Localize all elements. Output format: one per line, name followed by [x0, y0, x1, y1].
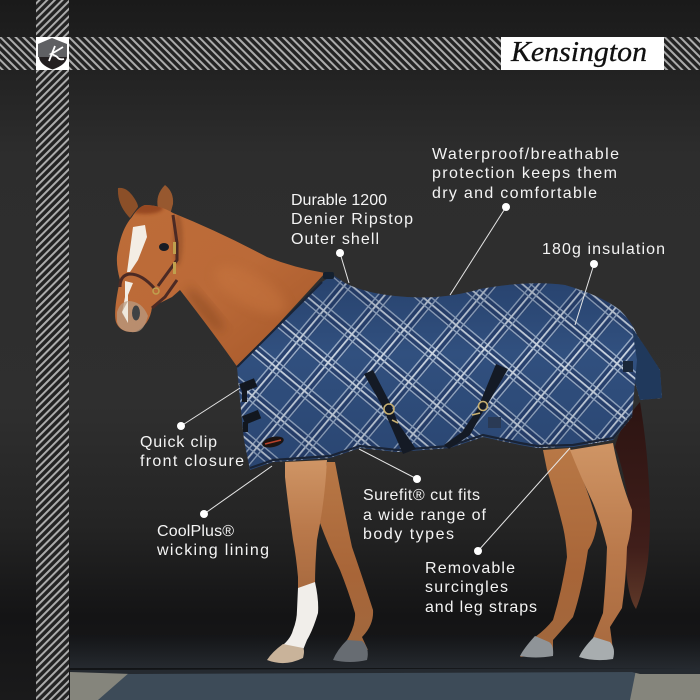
striped vertical band	[36, 0, 69, 700]
callout: wicking lining: CoolPlus®	[157, 523, 234, 540]
left ear	[118, 188, 138, 218]
icon: K shield logo	[36, 37, 69, 70]
far hind leg	[520, 448, 597, 657]
callout: waterproof/breathable: Waterproof/breathable	[432, 146, 619, 163]
callout: outer shell: Durable 1200	[291, 192, 387, 209]
callout: wicking lining	[156, 466, 272, 559]
callout: outer shell: Outer shell	[291, 231, 379, 248]
callout: front closure	[140, 388, 244, 470]
callout: wicking lining: wicking lining	[156, 542, 269, 559]
callout: surcingles	[425, 448, 570, 616]
muzzle	[117, 301, 148, 332]
nostril	[132, 306, 140, 320]
leather halter	[120, 215, 177, 308]
callout: surefit cut: body types	[363, 526, 454, 543]
callout: front closure: Quick clip	[140, 434, 217, 451]
callout: outer shell	[291, 192, 413, 283]
callout: front closure: front closure	[140, 453, 244, 470]
callout: surefit cut: Surefit® cut fits	[363, 487, 480, 504]
callout: surcingles: and leg straps	[425, 599, 537, 616]
callout: insulation: 180g insulation	[542, 241, 665, 258]
callout: waterproof/breathable: protection keeps them	[432, 165, 617, 182]
far front leg	[320, 462, 373, 650]
hooves on hind legs	[520, 636, 614, 660]
near front leg with white sock	[267, 460, 327, 663]
floor and ground	[70, 635, 700, 700]
rear patches	[623, 361, 633, 372]
callout: surefit cut: a wide range of	[363, 507, 487, 524]
strap buckles	[384, 402, 488, 423]
blanket	[237, 272, 662, 470]
callout: waterproof/breathable: dry and comfortable	[432, 185, 597, 202]
Kensington logo: Kensington	[510, 37, 647, 68]
callout: outer shell: Denier Ripstop	[291, 211, 413, 228]
surcingle strap one	[364, 370, 416, 454]
near hind leg	[570, 443, 632, 650]
neck tab	[323, 272, 334, 279]
callout: waterproof/breathable	[432, 146, 619, 295]
neck shading	[134, 205, 280, 332]
binding edge	[237, 282, 632, 468]
callout: surcingles: Removable	[425, 560, 515, 577]
striped horizontal band	[0, 37, 700, 70]
callout: surcingles: surcingles	[425, 579, 508, 596]
tail	[615, 402, 650, 609]
maker badge	[261, 434, 285, 450]
callout: surefit cut	[359, 449, 487, 543]
eye	[159, 243, 169, 251]
front clip closure	[239, 378, 261, 432]
surcingle strap two	[444, 364, 508, 449]
white blaze	[122, 225, 147, 323]
right ear	[157, 185, 173, 215]
hoof on far front leg	[333, 640, 368, 662]
head and neck shape	[115, 205, 325, 368]
callout: insulation	[542, 241, 665, 325]
horse head and neck	[115, 185, 325, 368]
